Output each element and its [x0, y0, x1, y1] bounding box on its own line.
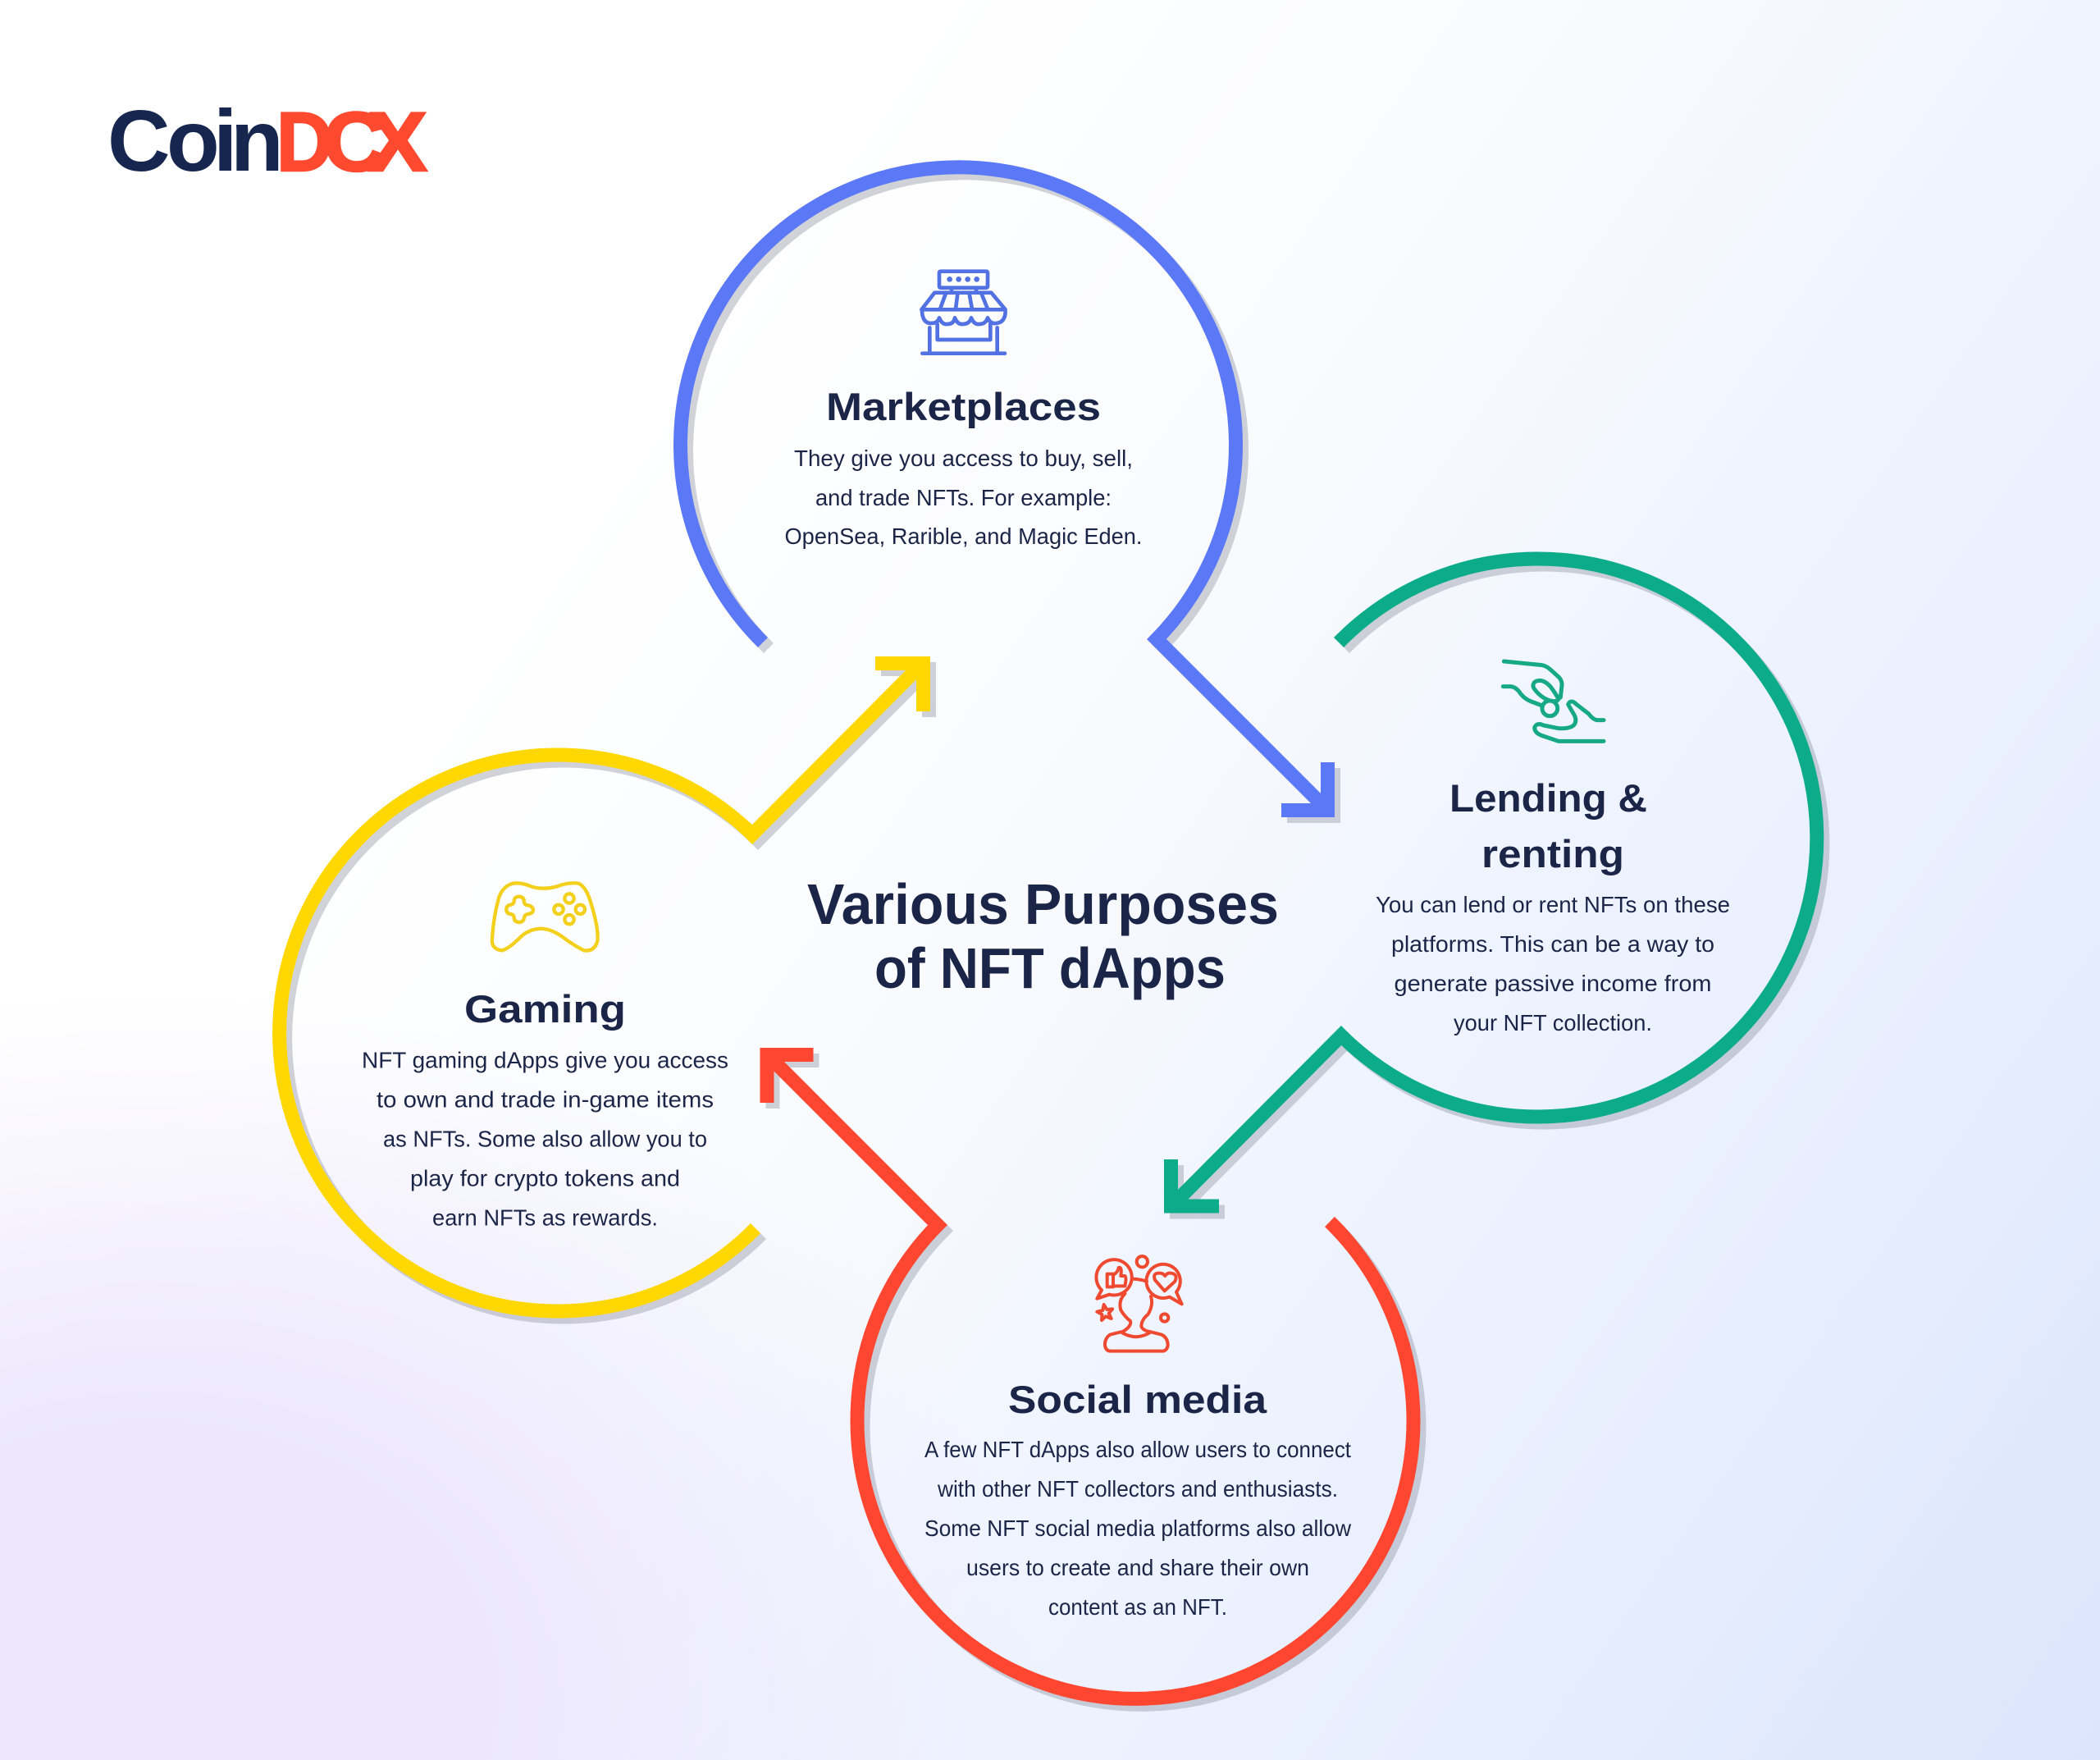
center title: Various Purposes [807, 872, 1279, 936]
text: lending description: your NFT collection. [1454, 1010, 1652, 1035]
center title: of NFT dApps [874, 936, 1226, 1000]
panel: marketplaces [681, 167, 1334, 816]
logo: CoinDCX [107, 93, 427, 190]
text: marketplaces description: and trade NFTs. For example: [815, 485, 1112, 510]
icon: hands exchanging coin [1503, 661, 1604, 741]
heading: Lending & renting: Lending & [1449, 776, 1647, 820]
text: social media description: with other NFT collectors and enthusiasts. [937, 1476, 1338, 1502]
text: social media description [924, 1437, 1352, 1620]
ring and arrow: red [767, 1054, 1419, 1704]
panel: social media [767, 1054, 1419, 1704]
logo: CoinDCX: Coin [107, 93, 284, 190]
text: lending description: You can lend or rent NFTs on these [1376, 892, 1730, 917]
text: lending description [1376, 892, 1730, 1035]
heading: Lending & renting: renting [1481, 832, 1624, 875]
ring and arrow: teal [1171, 559, 1823, 1212]
text: social media description: Some NFT social media platforms also allow [924, 1515, 1352, 1541]
icon: person with social bubbles [1096, 1256, 1182, 1351]
text: lending description: platforms. This can be a way to [1391, 931, 1714, 957]
icon: game controller [492, 883, 598, 951]
text: social media description: content as an NFT. [1048, 1594, 1227, 1620]
ring and arrow: blue [681, 167, 1334, 816]
text: gaming description: NFT gaming dApps give you access [362, 1047, 728, 1073]
text: social media description: A few NFT dApps also allow users to connect [924, 1437, 1351, 1462]
text: gaming description: as NFTs. Some also allow you to [383, 1126, 707, 1152]
text: marketplaces description [784, 446, 1142, 549]
text: gaming description: earn NFTs as rewards. [432, 1205, 658, 1231]
center title [807, 872, 1279, 1000]
ring and arrow: yellow [280, 663, 929, 1317]
text: gaming description: play for crypto tokens and [410, 1165, 680, 1191]
heading: Gaming: Gaming [464, 987, 626, 1031]
text: gaming description [362, 1047, 728, 1231]
logo: CoinDCX: C [323, 95, 386, 189]
heading: Social media: Social media [1008, 1378, 1267, 1421]
logo: CoinDCX: X [368, 95, 427, 189]
heading: Marketplaces: Marketplaces [826, 385, 1101, 428]
text: social media description: users to create and share their own [966, 1555, 1309, 1580]
logo: CoinDCX: D [276, 95, 333, 189]
text: lending description: generate passive income from [1395, 971, 1711, 996]
heading: Lending & renting [1449, 776, 1647, 875]
text: gaming description: to own and trade in-game items [377, 1086, 714, 1113]
panel: lending and renting [1171, 559, 1823, 1212]
text: marketplaces description: They give you access to buy, sell, [794, 446, 1133, 471]
text: marketplaces description: OpenSea, Rarible, and Magic Eden. [784, 523, 1142, 549]
icon: storefront [921, 272, 1006, 354]
panel: gaming [280, 663, 929, 1317]
